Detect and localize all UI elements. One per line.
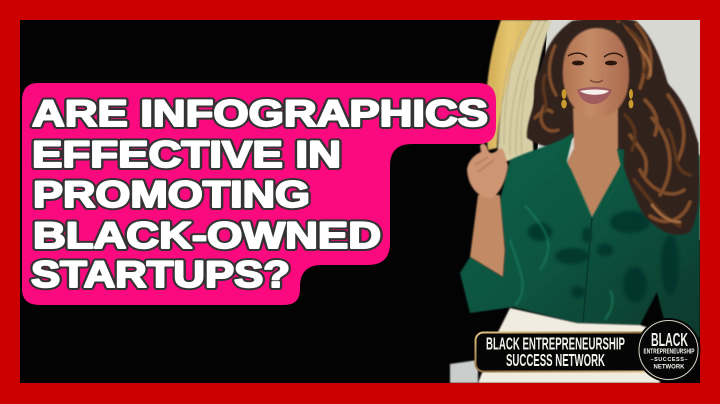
title line 1: ARE INFOGRAPHICS xyxy=(32,93,488,134)
glass table corner xyxy=(450,360,478,383)
title text weight reinforcement: STARTUPS? xyxy=(31,254,290,295)
circular logo xyxy=(636,318,700,382)
raised arm and hand xyxy=(467,144,508,277)
title line 4: BLACK-OWNED xyxy=(33,215,381,256)
shirt xyxy=(460,133,700,338)
logo word SUCCESS: –SUCCESS– xyxy=(650,357,688,363)
badge text line 2: SUCCESS NETWORK xyxy=(506,350,605,370)
face xyxy=(556,22,636,118)
title text weight reinforcement xyxy=(31,93,488,295)
earrings xyxy=(561,89,633,108)
hair front with curls xyxy=(535,22,699,235)
photo: woman with gold arc background xyxy=(450,18,700,383)
hair back xyxy=(526,20,700,208)
white trousers xyxy=(478,308,660,383)
network name badge xyxy=(476,332,654,372)
light grey wall xyxy=(530,20,700,240)
icon: gold arc xyxy=(486,20,552,162)
title text weight reinforcement: PROMOTING xyxy=(33,174,310,215)
title text weight reinforcement: BLACK-OWNED xyxy=(33,215,381,256)
neck and chest xyxy=(566,108,626,218)
title text xyxy=(31,93,488,295)
eyes, brows, nose, mouth xyxy=(568,53,623,104)
title text weight reinforcement: ARE INFOGRAPHICS xyxy=(32,93,488,134)
title line 3: PROMOTING xyxy=(33,174,310,215)
title line 2: EFFECTIVE IN xyxy=(32,134,341,175)
title line 5: STARTUPS? xyxy=(31,254,290,295)
title text weight reinforcement: EFFECTIVE IN xyxy=(32,134,341,175)
logo word NETWORK: NETWORK xyxy=(654,364,685,370)
pink title banner xyxy=(22,83,496,305)
logo word ENTREPRENEURSHIP: ENTREPRENEURSHIP xyxy=(644,348,695,356)
logo word BLACK: BLACK xyxy=(651,330,688,350)
